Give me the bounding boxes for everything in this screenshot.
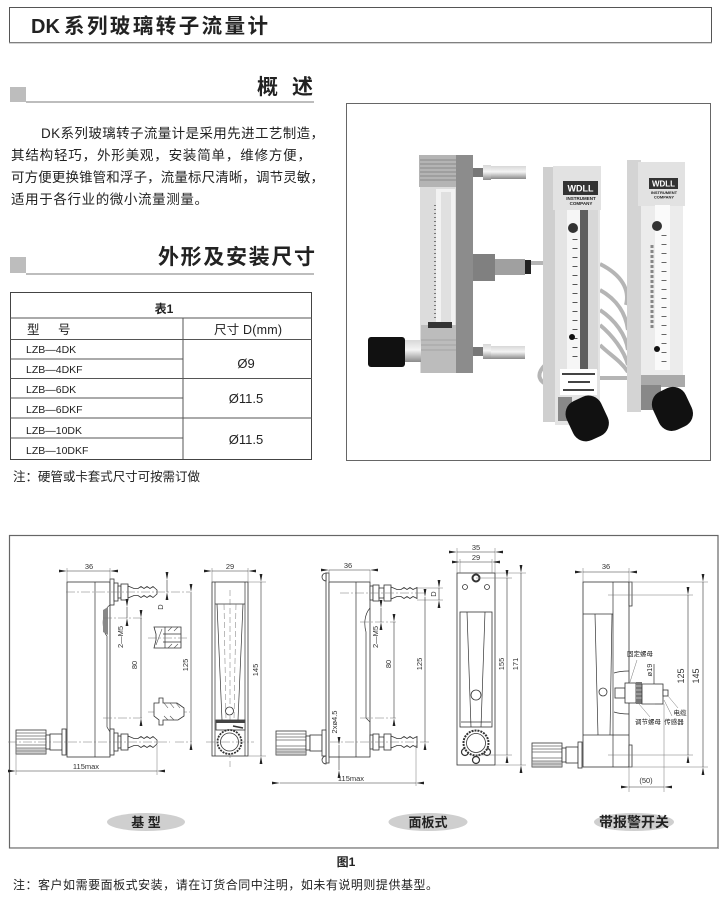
drawing: alarm switch type side view: 145 <box>691 668 701 684</box>
drawing: base type side view: 36 <box>85 562 93 571</box>
label: panel type <box>388 813 468 831</box>
overview text block: 适用于各行业的微小流量测量。 <box>11 192 208 207</box>
drawing: base type side view <box>8 562 192 775</box>
drawing: base type front view: 29 <box>226 562 234 571</box>
drawing: panel type front view: 35 <box>472 543 480 552</box>
table caption: 表1 <box>155 301 174 316</box>
heading: overview <box>10 76 314 103</box>
drawing: panel type front view <box>457 543 526 765</box>
label: alarm switch type: 带报警开关 <box>599 814 669 830</box>
overview text block <box>11 125 324 207</box>
alarm switch labels <box>627 649 687 726</box>
drawing: base type side view: 80 <box>130 661 139 669</box>
drawing: alarm switch type side view: 125 <box>676 668 686 684</box>
table models: LZB—10DKF <box>26 445 88 457</box>
table sizes: Ø9 <box>237 356 255 371</box>
drawing: base type side view: 2—M5 <box>116 626 125 648</box>
alarm switch labels: 调节螺母 <box>635 717 662 726</box>
drawing: panel type side view: D <box>429 591 438 597</box>
device 2 label <box>563 181 598 206</box>
drawing: panel type front view: 171 <box>511 658 520 670</box>
table models: LZB—6DKF <box>26 404 83 416</box>
drawing: base type side view: 125 <box>181 659 190 671</box>
title text: DK <box>31 16 61 38</box>
table models: LZB—4DKF <box>26 364 83 376</box>
table header <box>27 323 282 337</box>
table 1 <box>10 292 312 460</box>
figure caption: 图1 <box>337 855 356 869</box>
bottom note: 注：客户如需要面板式安装，请在订货合同中注明，如未有说明则提供基型。 <box>13 877 438 892</box>
drawing: panel type front view: 29 <box>472 553 480 562</box>
drawing: panel type front view: 155 <box>497 658 506 670</box>
device 2 <box>543 166 614 446</box>
alarm switch labels: 固定螺母 <box>627 649 654 658</box>
title text: 系列玻璃转子流量计 <box>64 15 268 38</box>
drawing: panel type side view: 125 <box>415 658 424 670</box>
drawing: panel type side view: 2—M5 <box>371 626 380 648</box>
table models: LZB—10DK <box>26 425 82 437</box>
device 1 <box>368 155 531 373</box>
table sizes: Ø11.5 <box>229 432 263 447</box>
drawing: alarm switch type side view: ø19 <box>645 664 654 676</box>
table sizes <box>229 356 263 447</box>
label: base type <box>107 813 185 831</box>
drawing: base type side view: 115max <box>73 762 99 771</box>
table models: LZB—6DK <box>26 384 76 396</box>
drawing: base type side view: D <box>156 604 165 610</box>
table models: LZB—4DK <box>26 344 76 356</box>
alarm switch labels: 电缆 <box>674 708 687 717</box>
overview text block: DK系列玻璃转子流量计是采用先进工艺制造， <box>41 125 324 141</box>
drawing: alarm switch type side view <box>532 562 708 792</box>
cables <box>530 263 630 385</box>
table header: 型 <box>27 323 40 337</box>
drawing: panel type side view: 36 <box>344 561 352 570</box>
drawing: alarm switch type side view: 36 <box>602 562 610 571</box>
title bar <box>9 8 712 43</box>
device 2 label: WDLL <box>568 184 594 194</box>
device 3 label: WDLL <box>652 180 675 188</box>
heading: dimensions <box>10 246 315 275</box>
overview text block: 可方便更换锥管和浮子，流量标尺清晰，调节灵敏， <box>11 170 324 185</box>
heading: dimensions: 外形及安装尺寸 <box>158 246 315 269</box>
device 3 <box>627 160 698 436</box>
panel: product photo <box>346 104 710 460</box>
drawing: panel type side view: 115max <box>338 774 364 783</box>
drawing: panel type side view: 2xø4.5 <box>330 711 339 733</box>
overview text block: 其结构轻巧，外形美观，安装简单，维修方便， <box>11 147 311 163</box>
drawing: base type front view <box>206 562 266 770</box>
drawing: fitting section details <box>148 627 190 725</box>
panel: dimension drawings frame <box>8 536 719 848</box>
table note: 注：硬管或卡套式尺寸可按需订做 <box>13 469 200 484</box>
device 2 label: COMPANY <box>570 201 592 206</box>
heading: overview: 概 述 <box>257 76 313 99</box>
alarm switch labels: 传感器 <box>664 717 684 726</box>
device 3 label: COMPANY <box>654 194 674 200</box>
table models <box>26 344 88 457</box>
table header: 号 <box>58 323 71 337</box>
drawing: base type front view: 145 <box>251 664 260 676</box>
table sizes: Ø11.5 <box>229 391 263 406</box>
drawing: panel type side view: 80 <box>384 660 393 668</box>
device 3 label <box>649 178 678 200</box>
label: panel type: 面板式 <box>408 815 448 830</box>
label: base type: 基 型 <box>131 815 161 830</box>
table header: 尺寸 D(mm) <box>214 323 282 337</box>
device 3 label: INSTRUMENT <box>651 190 678 195</box>
drawing: alarm switch type side view: (50) <box>639 776 653 785</box>
drawing: panel type side view <box>276 561 443 786</box>
device 2 label: INSTRUMENT <box>566 196 596 201</box>
